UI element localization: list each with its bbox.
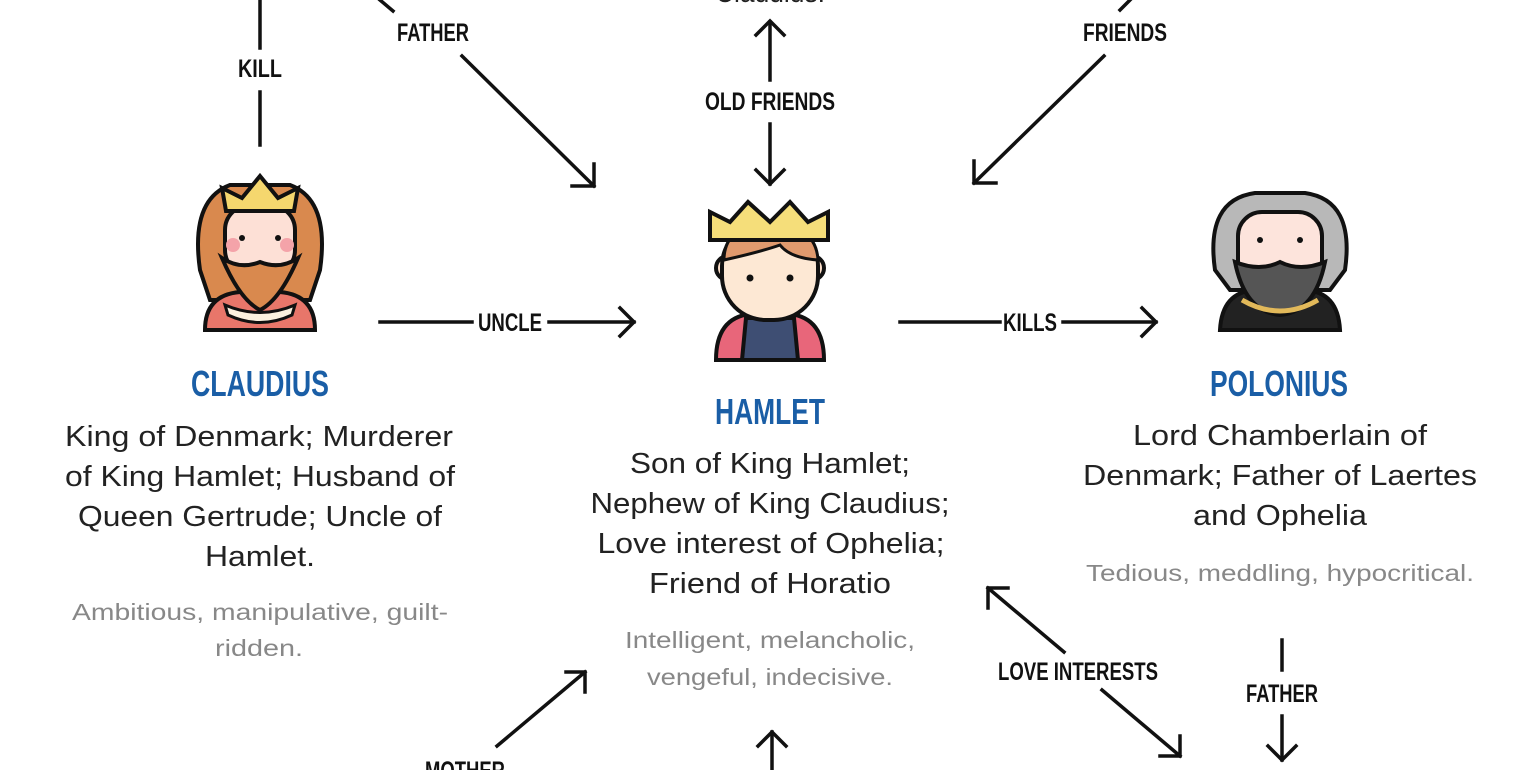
text: claudius: Queen Gertrude; Uncle of: [78, 501, 443, 533]
arrow: old friends: OLD FRIENDS: [705, 88, 835, 116]
icon: hamlet: [710, 202, 828, 360]
text: hamlet: Friend of Horatio: [649, 568, 891, 600]
text: polonius: POLONIUS: [1210, 363, 1348, 404]
arrow: friends: FRIENDS: [1083, 19, 1167, 47]
arrow: friends: [974, 0, 1167, 183]
arrow: bottom up: [758, 732, 786, 770]
arrow: father (bottom): FATHER: [1246, 680, 1318, 708]
text: hamlet: HAMLET: [715, 391, 825, 432]
text: claudius: CLAUDIUS: [191, 363, 329, 404]
arrow: old friends: [705, 0, 835, 184]
text: claudius: Hamlet.: [205, 541, 315, 573]
text: hamlet: [590, 391, 950, 690]
text: claudius: [65, 363, 456, 661]
arrow: kill: KILL: [238, 55, 282, 83]
text: claudius: of King Hamlet; Husband of: [65, 461, 456, 493]
text: hamlet: Nephew of King Claudius;: [590, 488, 950, 520]
text: polonius: and Ophelia: [1193, 500, 1368, 532]
text: hamlet: Intelligent, melancholic,: [625, 627, 915, 653]
arrow: father (bottom): [1246, 640, 1318, 760]
arrow: uncle: UNCLE: [478, 309, 542, 337]
arrow: mother: [425, 672, 585, 770]
arrow: kills: [900, 308, 1156, 337]
text: hamlet: Son of King Hamlet;: [630, 448, 910, 480]
text: hamlet: Love interest of Ophelia;: [598, 528, 944, 560]
arrow: father (top): [380, 0, 594, 186]
text: claudius: King of Denmark; Murderer: [65, 421, 453, 453]
text: polonius: [1083, 363, 1477, 586]
icon: polonius: [1213, 193, 1347, 330]
text: claudius: Ambitious, manipulative, guilt-: [72, 599, 448, 625]
text: polonius: Tedious, meddling, hypocritical.: [1086, 560, 1474, 586]
arrow: father (top): FATHER: [397, 19, 469, 47]
text: polonius: Denmark; Father of Laertes: [1083, 460, 1477, 492]
arrow: love interests: [988, 588, 1180, 756]
arrow: love interests: LOVE INTERESTS: [998, 658, 1158, 686]
icon: claudius: [198, 176, 322, 330]
text: claudius: ridden.: [215, 635, 303, 661]
arrow: uncle: [380, 308, 634, 337]
text: hamlet: vengeful, indecisive.: [647, 664, 893, 690]
arrow: kills: KILLS: [1003, 309, 1057, 337]
text: polonius: Lord Chamberlain of: [1133, 420, 1428, 452]
